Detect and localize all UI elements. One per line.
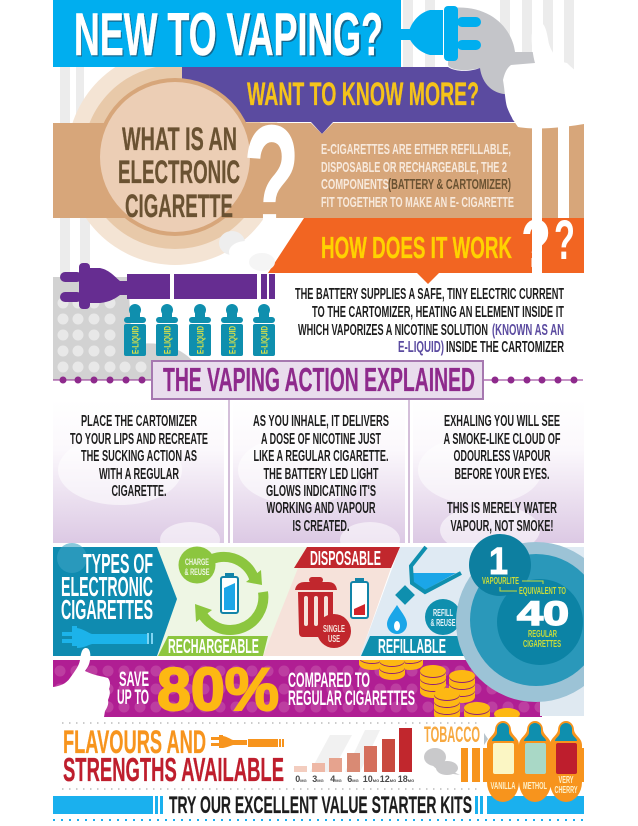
heading: types of electronic cigarettes: CIGARETTES — [61, 594, 153, 625]
text block: e-cigarette description: DISPOSABLE OR RECHARGEABLE, THE 2 — [321, 159, 507, 176]
text: compared to regular cigarettes: COMPARED TO — [288, 669, 370, 692]
icon: recycling arrows — [201, 557, 263, 630]
panel: step 2: AS YOU INHALE, IT DELIVERS — [253, 413, 389, 430]
text block: how the battery works: E-LIQUID) — [398, 339, 444, 356]
heading: what is an electronic cigarette — [118, 121, 240, 224]
callout: 1 vapourlite equals 40 regular cigarettes: 1 — [489, 541, 508, 583]
bottle: very cherry — [550, 721, 582, 802]
callout: 1 vapourlite equals 40 regular cigarettes: VAPOURLITE — [482, 576, 519, 587]
bar chart: nicotine strengths: 6MG — [347, 774, 359, 784]
orange stripes — [461, 748, 584, 782]
heading: how does it work: HOW DOES IT WORK — [321, 230, 512, 265]
heading: what is an electronic cigarette: WHAT IS AN — [122, 121, 237, 157]
header banner — [53, 0, 401, 70]
icons: e-liquid bottles — [124, 304, 275, 356]
icon: arrow heads — [195, 570, 262, 622]
bar chart: nicotine strengths: 18MG — [398, 774, 414, 784]
panel: step 1: PLACE THE CARTOMIZER — [81, 413, 197, 430]
badge: refill and reuse — [425, 599, 461, 635]
callout: 1 vapourlite equals 40 regular cigarettes: EQUIVALENT TO — [519, 586, 566, 597]
panel: step 2: WORKING AND VAPOUR — [266, 500, 376, 517]
title: NEW TO VAPING? — [75, 2, 385, 70]
panel: refillable — [361, 547, 468, 658]
text block: e-cigarette description: COMPONENTS — [321, 176, 389, 193]
icon: blue plug — [400, 6, 481, 61]
callout: 1 vapourlite equals 40 regular cigarettes: REGULAR — [528, 629, 557, 640]
label: rechargeable: RECHARGEABLE — [168, 636, 259, 658]
badge: charge and reuse: & REUSE — [184, 567, 210, 578]
text block: how the battery works: (KNOWN AS AN — [492, 322, 564, 339]
decorative hand finger stripes — [532, 122, 569, 274]
badge: refill and reuse: & REUSE — [430, 618, 456, 629]
icon: refill bottle — [395, 547, 461, 605]
heading: what is an electronic cigarette: ELECTRONIC — [118, 154, 240, 190]
badge: single use: USE — [328, 634, 340, 645]
icon: grey smoke — [424, 748, 460, 775]
panel: step 1: THE SUCKING ACTION AS — [81, 448, 197, 465]
heading: types of electronic cigarettes: TYPES OF — [83, 548, 153, 579]
heading: the vaping action explained — [152, 361, 483, 399]
title — [74, 1, 385, 70]
icon: white double question marks: ? — [521, 206, 551, 282]
text block: e-cigarette description: (BATTERY & CARTOMIZER) — [388, 176, 511, 193]
heading: flavours and strengths available: FLAVOURS AND — [63, 724, 206, 760]
dotted lines for flavours — [62, 723, 482, 789]
icon: grey plug behind hand — [448, 8, 541, 95]
panel: grey dotted backdrop — [53, 277, 205, 380]
panel: step 2 — [233, 400, 405, 558]
label: refillable: REFILLABLE — [378, 636, 446, 658]
dot pattern — [53, 660, 542, 717]
panel: step 1 — [53, 400, 224, 558]
column dividers — [228, 399, 410, 543]
title: NEW TO VAPING? — [74, 1, 383, 68]
panel: step 2: IS CREATED. — [292, 518, 350, 535]
icons: e-liquid bottles: E-LIQUID — [228, 326, 238, 354]
dotted blue footer line — [53, 819, 583, 821]
heading: flavours and strengths available: STRENGTHS AVAILABLE — [63, 751, 284, 788]
badge: refill and reuse: REFILL — [433, 608, 453, 619]
text: compared to regular cigarettes: REGULAR CIGARETTES — [288, 687, 415, 710]
callout: 1 vapourlite equals 40 regular cigarettes — [482, 541, 569, 650]
icon: white double question marks: ? — [554, 208, 575, 271]
icon: white question mark: ? — [243, 93, 300, 269]
panel: step 2: LIKE A REGULAR CIGARETTE. — [254, 448, 388, 465]
panel: savings — [53, 648, 542, 717]
panel: step 3: THIS IS MERELY WATER — [447, 500, 557, 517]
panel: how does it work — [268, 218, 584, 284]
heading: flavours and strengths available — [63, 724, 284, 788]
text: save up to: SAVE — [119, 668, 149, 691]
callout: 1 vapourlite equals 40 regular cigarettes: CIGARETTES — [523, 639, 561, 650]
label: disposable: DISPOSABLE — [310, 548, 381, 570]
panel: step 2: GLOWS INDICATING IT'S — [266, 483, 376, 500]
text block: e-cigarette description: FIT TOGETHER TO MAKE AN E- CIGARETTE — [321, 194, 514, 211]
panel: refillable background — [360, 547, 584, 656]
flavour bottles — [461, 721, 584, 802]
bottom starter kits banner — [53, 792, 584, 819]
bar chart: nicotine strengths: 4MG — [330, 774, 342, 784]
bar chart: nicotine strengths: 3MG — [312, 774, 324, 784]
icons: e-liquid bottles: E-LIQUID — [162, 326, 172, 354]
bottle: vanilla: VANILLA — [490, 781, 516, 792]
icon: purple e-cigarette plug — [60, 263, 275, 309]
bar chart: nicotine strengths: 12MG — [380, 774, 396, 784]
heading: types of electronic cigarettes: ELECTRONIC — [61, 571, 153, 602]
text block: e-cigarette description — [321, 141, 514, 211]
panel: step 1: TO YOUR LIPS AND RECREATE — [70, 431, 208, 448]
text: save up to — [117, 668, 149, 709]
icon: charged battery — [221, 573, 238, 613]
heading: types of electronic cigarettes — [61, 548, 153, 625]
heading: want to know more: WANT TO KNOW MORE? — [247, 76, 479, 112]
icon: smoke cloud — [219, 231, 275, 271]
panel: step 3: BEFORE YOUR EYES. — [454, 466, 550, 483]
text: 80 percent: 80% — [157, 656, 279, 723]
big concentric circles panel — [456, 534, 584, 716]
badge: single use — [317, 614, 351, 648]
badge: charge and reuse — [178, 546, 216, 584]
icon: trash can — [295, 577, 337, 637]
dotted divider line — [53, 376, 583, 384]
text block: how the battery works: WHICH VAPORIZES A NICOTINE SOLUTION — [298, 322, 488, 339]
bottle: very cherry: CHERRY — [554, 785, 578, 796]
panel: step 2: A DOSE OF NICOTINE JUST — [261, 431, 381, 448]
bottle: methol: METHOL — [523, 781, 547, 792]
bar chart: nicotine strengths — [294, 728, 414, 784]
decorative grey stripes — [60, 0, 574, 276]
text: save up to: UP TO — [117, 686, 149, 709]
icon: orange e-cigarette — [211, 735, 284, 748]
panel: want to know more — [182, 67, 518, 134]
panel: disposable — [263, 547, 400, 656]
icon: coins — [359, 660, 520, 717]
icon: blue e-cigarette — [62, 626, 153, 648]
icon: low battery — [351, 578, 368, 618]
heading: what is an electronic cigarette: CIGARETTE — [125, 188, 233, 224]
bottle: very cherry: VERY — [558, 775, 574, 786]
text block: e-cigarette description: E-CIGARETTES ARE EITHER REFILLABLE, — [321, 141, 511, 158]
circle rings: what is an electronic cigarette backdrop — [72, 67, 278, 265]
label: rechargeable — [158, 636, 268, 658]
panel: rechargeable — [157, 546, 307, 658]
icons: e-liquid bottles: E-LIQUID — [260, 326, 270, 354]
bar chart: nicotine strengths: 10MG — [363, 774, 379, 784]
panel: types of electronic cigarettes — [53, 543, 177, 656]
badge: single use: SINGLE — [323, 624, 345, 635]
panel: step 1: WITH A REGULAR — [99, 466, 179, 483]
icons: e-liquid bottles: E-LIQUID — [130, 326, 140, 354]
panel: step 2: THE BATTERY LED LIGHT — [264, 466, 379, 483]
icon: water drop — [387, 605, 407, 634]
badge: charge and reuse: CHARGE — [185, 557, 209, 568]
panel: step 3: VAPOUR, NOT SMOKE! — [450, 518, 554, 535]
icon: thumbs up — [53, 648, 110, 717]
panel: what is an electronic cigarette — [53, 78, 584, 236]
panel: step 3: ODOURLESS VAPOUR — [454, 448, 551, 465]
panels: vaping action steps — [53, 400, 584, 558]
label: tobacco — [424, 722, 488, 747]
label: tobacco: TOBACCO — [424, 722, 480, 747]
icons: e-liquid bottles: E-LIQUID — [196, 326, 206, 354]
panel: step 1: CIGARETTE. — [112, 483, 166, 500]
text: compared to regular cigarettes — [288, 669, 415, 710]
callout: 1 vapourlite equals 40 regular cigarettes: 40 — [517, 595, 569, 633]
panel: step 3 — [413, 400, 584, 555]
text block: how the battery works — [295, 286, 564, 356]
icon: thumbs up hand — [503, 22, 584, 128]
bar chart: nicotine strengths: 0MG — [295, 774, 307, 784]
